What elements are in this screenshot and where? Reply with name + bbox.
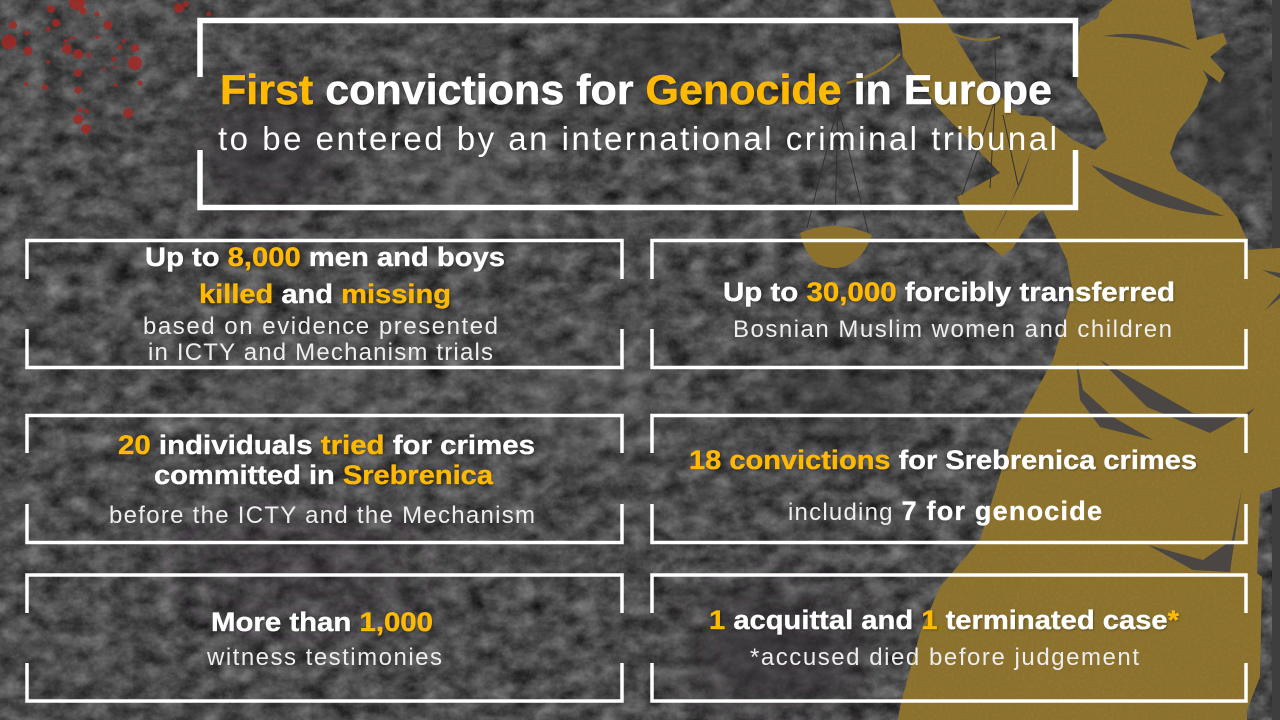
- panel: convictions: [652, 416, 1246, 542]
- headline: 20 individuals tried for crimes: [118, 430, 535, 460]
- description: before the ICTY and the Mechanism: [109, 502, 535, 529]
- panel: forcibly transferred: [652, 240, 1246, 368]
- panel: acquittal and terminated case: [652, 575, 1246, 701]
- description: witness testimonies: [206, 644, 442, 671]
- title panel: [200, 20, 1076, 208]
- panel: men and boys killed and missing: [27, 240, 622, 368]
- statue folds and blindfold: [992, 34, 1280, 572]
- scale chains: [807, 43, 1018, 232]
- title: First convictions for Genocide in Europe: [220, 66, 1052, 113]
- panel: individuals tried: [27, 416, 622, 542]
- statue texture: [880, 0, 1280, 720]
- blood splatter: [2, 0, 212, 134]
- headline: Up to 30,000 forcibly transferred: [723, 277, 1175, 307]
- headline: Up to 8,000 men and boys: [145, 242, 505, 272]
- description: including 7 for genocide: [788, 496, 1102, 526]
- scale beam: [847, 34, 1000, 83]
- scales of justice: [800, 34, 1018, 268]
- description: Bosnian Muslim women and children: [733, 316, 1172, 343]
- headline second line: killed and missing: [199, 279, 451, 309]
- statue body: [890, 0, 1280, 720]
- frame: [652, 416, 1246, 542]
- description: based on evidence presented: [143, 313, 498, 340]
- frame: [652, 240, 1246, 368]
- headline: More than 1,000: [211, 607, 433, 637]
- description second line: in ICTY and Mechanism trials: [148, 339, 493, 366]
- headline: 1 acquittal and 1 terminated case *: [709, 605, 1180, 635]
- frame: [652, 575, 1246, 701]
- description: *accused died before judgement: [750, 644, 1139, 671]
- frame: [27, 575, 622, 701]
- subtitle: to be entered by an international criminal tribunal: [218, 120, 1057, 157]
- statue: Lady Justice silhouette: [880, 0, 1280, 720]
- frame: [27, 416, 622, 542]
- panel: witness testimonies: [27, 575, 622, 701]
- left scale pan: [800, 226, 872, 268]
- headline second line: committed in Srebrenica: [154, 460, 494, 490]
- title frame: [200, 20, 1076, 208]
- headline: 18 convictions for Srebrenica crimes: [689, 445, 1197, 475]
- frame: [27, 240, 622, 368]
